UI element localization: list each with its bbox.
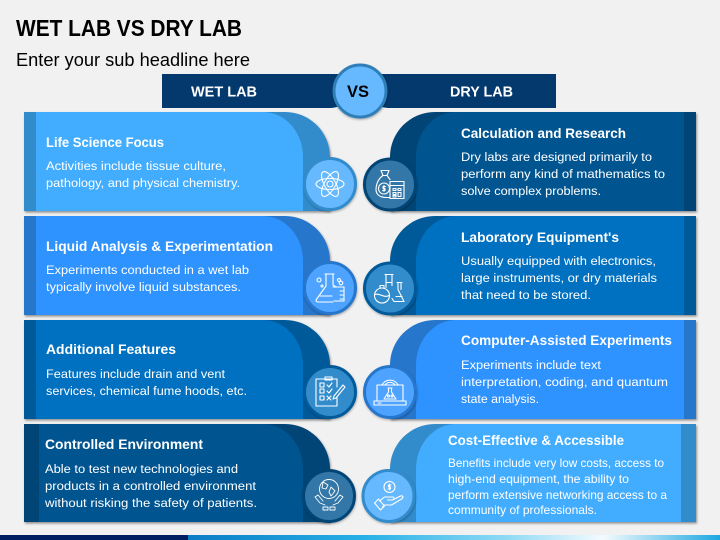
column header: dry lab: DRY LAB bbox=[450, 84, 513, 100]
column header: wet lab bbox=[162, 74, 346, 108]
text block: laboratory equipment: Usually equipped with electronics, bbox=[461, 254, 656, 268]
icon: globe in hands bbox=[304, 470, 354, 522]
text block: computer-assisted experiments: interpretation, coding, and quantum bbox=[461, 375, 668, 389]
heading: calculation and research: Calculation and Research bbox=[461, 126, 626, 141]
text block: controlled environment: Able to test new technologies and bbox=[45, 462, 238, 476]
heading: additional features: Additional Features bbox=[46, 342, 176, 357]
icon: checklist and pencil bbox=[304, 366, 356, 418]
panel: laboratory equipment bbox=[364, 216, 696, 315]
text block: calculation and research: Dry labs are designed primarily to bbox=[461, 150, 652, 164]
heading: computer-assisted experiments: Computer-Assisted Experiments bbox=[461, 333, 672, 348]
icon: atom bbox=[304, 158, 356, 210]
vs badge bbox=[334, 65, 386, 117]
panel: calculation and research bbox=[364, 112, 696, 211]
icon: money bag and calculator bbox=[364, 159, 416, 210]
text block: computer-assisted experiments: Experiments include text bbox=[461, 358, 602, 372]
text block: additional features: Features include drain and vent bbox=[46, 367, 226, 381]
heading: cost-effective and accessible: Cost-Effective & Accessible bbox=[448, 433, 624, 448]
vs badge: VS bbox=[347, 83, 369, 101]
column header: dry lab bbox=[372, 74, 556, 108]
text block: computer-assisted experiments: state analysis. bbox=[461, 392, 539, 406]
text block: calculation and research bbox=[461, 150, 665, 198]
icon: flask and beaker bbox=[304, 262, 356, 314]
column header: wet lab: WET LAB bbox=[191, 84, 257, 100]
panel: life science focus bbox=[24, 112, 356, 211]
text block: controlled environment bbox=[44, 462, 257, 510]
icon: test tube and flasks bbox=[364, 263, 416, 314]
title: WET LAB VS DRY LAB bbox=[16, 15, 242, 41]
text block: additional features: services, chemical fume hoods, etc. bbox=[46, 384, 247, 398]
text block: cost-effective and accessible: perform extensive networking access to a bbox=[448, 489, 667, 502]
panel: additional features bbox=[24, 320, 356, 419]
panel: computer-assisted experiments bbox=[364, 320, 696, 419]
text block: liquid analysis: typically involve liquid substances. bbox=[46, 280, 241, 294]
text block: calculation and research: solve complex problems. bbox=[461, 184, 601, 198]
text block: cost-effective and accessible: high-end equipment, the ability to bbox=[448, 473, 630, 486]
text block: life science focus bbox=[46, 159, 240, 190]
text block: computer-assisted experiments bbox=[461, 358, 668, 406]
text block: life science focus: Activities include tissue culture, bbox=[46, 159, 226, 173]
text block: cost-effective and accessible: community of professionals. bbox=[448, 504, 597, 517]
text block: cost-effective and accessible bbox=[448, 457, 667, 517]
text block: laboratory equipment bbox=[461, 254, 657, 302]
text block: controlled environment: products in a controlled environment bbox=[45, 479, 257, 493]
text block: additional features bbox=[46, 367, 247, 398]
text block: controlled environment: without risking the safety of patients. bbox=[44, 496, 257, 510]
panel: controlled environment bbox=[24, 424, 354, 522]
panel: cost-effective and accessible bbox=[363, 424, 696, 522]
footer bar bbox=[0, 535, 720, 540]
text block: laboratory equipment: large instruments, or dry materials bbox=[461, 271, 657, 285]
text block: life science focus: pathology, and physical chemistry. bbox=[46, 176, 240, 190]
text block: laboratory equipment: that need to be stored. bbox=[461, 288, 591, 302]
heading: controlled environment: Controlled Environment bbox=[45, 437, 203, 452]
text block: liquid analysis: Experiments conducted in a wet lab bbox=[46, 263, 249, 277]
heading: liquid analysis: Liquid Analysis & Experimentation bbox=[46, 239, 273, 254]
panel: liquid analysis and experimentation bbox=[24, 216, 356, 315]
icon: laptop with flask and gear bbox=[364, 366, 416, 418]
heading: life science focus: Life Science Focus bbox=[46, 135, 164, 150]
icon: coin over hand bbox=[363, 470, 414, 522]
text block: liquid analysis bbox=[46, 263, 249, 294]
text block: calculation and research: perform any kind of mathematics to bbox=[461, 167, 665, 181]
text block: cost-effective and accessible: Benefits include very low costs, access to bbox=[448, 457, 665, 470]
subtitle: Enter your sub headline here bbox=[16, 50, 250, 70]
heading: laboratory equipment: Laboratory Equipment's bbox=[461, 230, 619, 245]
